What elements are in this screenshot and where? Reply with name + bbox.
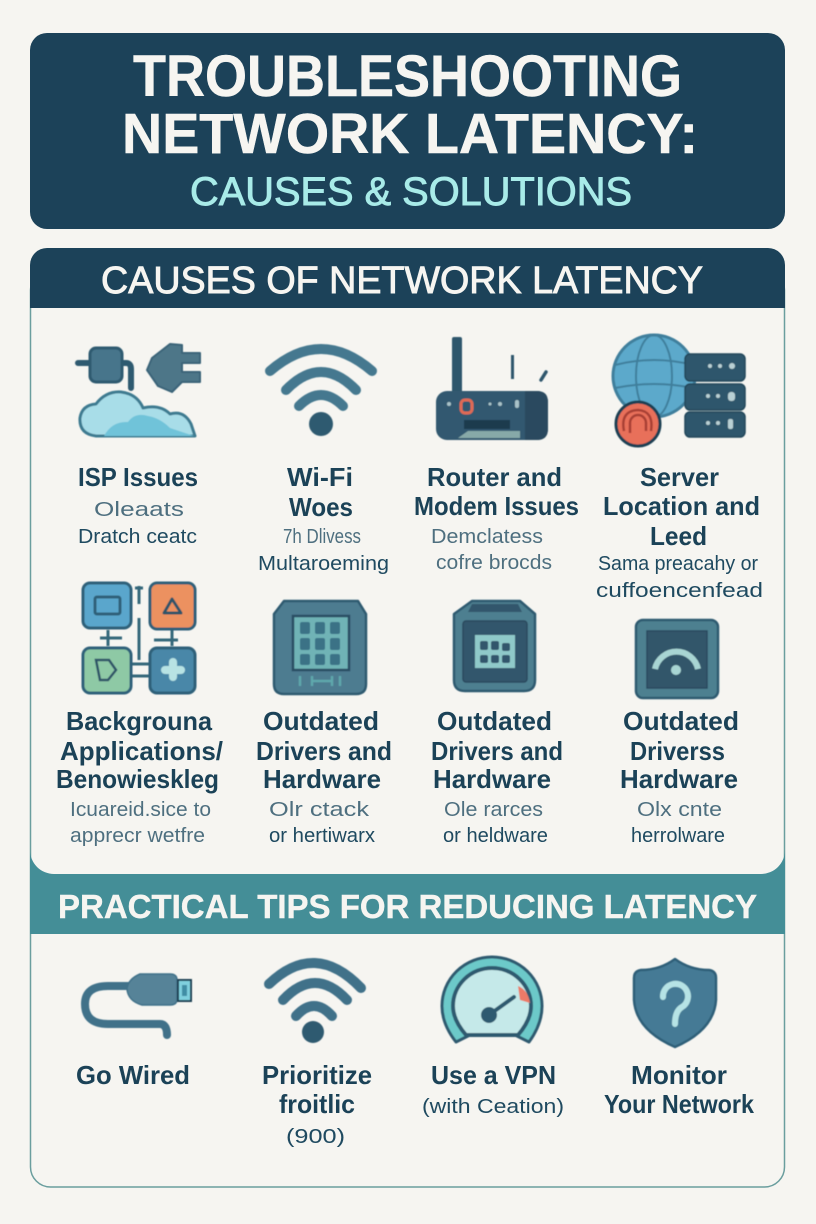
- label: (900): [286, 1126, 345, 1148]
- label: Modem Issues: [414, 491, 579, 521]
- heading: causes of network latency: [30, 248, 785, 308]
- icon: hardware device: [454, 601, 535, 691]
- tip: use a VPN: [422, 957, 564, 1118]
- cause: server location and load: [596, 335, 763, 602]
- label: Ole rarces: [444, 799, 543, 821]
- icon: globe and server: [613, 335, 745, 446]
- label: Demclatess: [431, 526, 543, 548]
- label: Olr ctack: [269, 799, 370, 821]
- label: Woes: [289, 492, 353, 522]
- title banner: [30, 33, 785, 229]
- cause: background applications: [56, 583, 223, 847]
- icon: application tiles: [83, 583, 195, 693]
- label: Drivers and: [431, 736, 563, 766]
- icon: speedometer: [442, 957, 542, 1042]
- label: Prioritize: [262, 1060, 372, 1090]
- label: [604, 1060, 754, 1119]
- label: [262, 1060, 372, 1148]
- label: Wi-Fi: [287, 462, 353, 492]
- label: or heldware: [443, 825, 548, 847]
- cause: Wi-Fi woes: [258, 349, 389, 575]
- icon: plugs and cloud: [78, 344, 200, 436]
- label: Use a VPN: [431, 1060, 556, 1090]
- panel: causes and tips frame: [30, 248, 785, 1187]
- cause: outdated drivers and hardware 2: [431, 601, 563, 847]
- label: Go Wired: [76, 1060, 190, 1090]
- label: Your Network: [604, 1089, 754, 1119]
- icon: cable: [85, 974, 191, 1035]
- label: Backgrouna: [66, 706, 213, 736]
- label: Driverss: [630, 736, 725, 766]
- label: Drivers and: [256, 736, 392, 766]
- cause: router and modem issues: [414, 337, 579, 574]
- icon: wifi: [270, 349, 372, 436]
- label: 7h Dlivess: [283, 526, 361, 548]
- icon: shield: [634, 959, 716, 1047]
- cause: outdated drivers and hardware 3: [620, 620, 739, 847]
- title text: [122, 44, 698, 166]
- title text: TROUBLESHOOTING: [133, 44, 682, 109]
- label: [56, 706, 223, 847]
- label: Dratch ceatc: [78, 526, 197, 548]
- label: Hardware: [620, 764, 738, 794]
- tip: go wired: [76, 974, 191, 1090]
- label: Location and: [603, 491, 760, 521]
- label: Oleaats: [94, 499, 184, 521]
- label: Outdated: [623, 706, 739, 736]
- tip: prioritize traffic: [262, 963, 372, 1148]
- label: Hardware: [433, 764, 551, 794]
- label: [258, 462, 389, 575]
- label: Monitor: [631, 1060, 727, 1090]
- label: froitlic: [279, 1089, 355, 1119]
- label: Hardware: [263, 764, 381, 794]
- icon: chip: [274, 601, 366, 694]
- icon: router: [436, 337, 548, 440]
- label: Icuareid.sice to: [70, 799, 211, 821]
- label: Benowieskleg: [56, 764, 219, 794]
- tip: monitor your network: [604, 959, 754, 1119]
- label: or hertiwarx: [269, 825, 375, 847]
- heading: practical tips: [30, 850, 785, 934]
- label: cuffoencenfead: [596, 580, 763, 602]
- label: Outdated: [437, 706, 552, 736]
- heading: causes of network latency: CAUSES OF NETWORK LATENCY: [101, 260, 703, 302]
- label: apprecr wetfre: [70, 825, 205, 847]
- cause: outdated drivers and hardware 1: [256, 601, 392, 847]
- label: Olx cnte: [637, 799, 722, 821]
- label: Leed: [650, 521, 707, 551]
- label: Outdated: [263, 706, 379, 736]
- label: Sama preacahy or: [598, 553, 758, 575]
- icon: wifi: [269, 963, 361, 1043]
- label: Server: [640, 462, 719, 492]
- label: ISP Issues: [78, 462, 198, 492]
- label: [422, 1060, 564, 1118]
- subtitle: CAUSES & SOLUTIONS: [190, 170, 632, 214]
- label: [256, 706, 392, 847]
- title text: NETWORK LATENCY:: [122, 102, 698, 166]
- heading: practical tips: PRACTICAL TIPS FOR REDUCING LATENCY: [58, 888, 757, 925]
- label: [620, 706, 739, 847]
- cause: ISP issues: [78, 344, 200, 548]
- label: Router and: [427, 462, 562, 492]
- label: [596, 462, 763, 602]
- icon: gauge box: [636, 620, 718, 698]
- label: [78, 462, 198, 548]
- label: [431, 706, 563, 847]
- label: Applications/: [60, 736, 223, 766]
- label: (with Ceation): [422, 1096, 564, 1118]
- label: Multaroeming: [258, 553, 389, 575]
- label: cofre brocds: [436, 552, 552, 574]
- label: herrolware: [631, 825, 725, 847]
- label: [414, 462, 579, 574]
